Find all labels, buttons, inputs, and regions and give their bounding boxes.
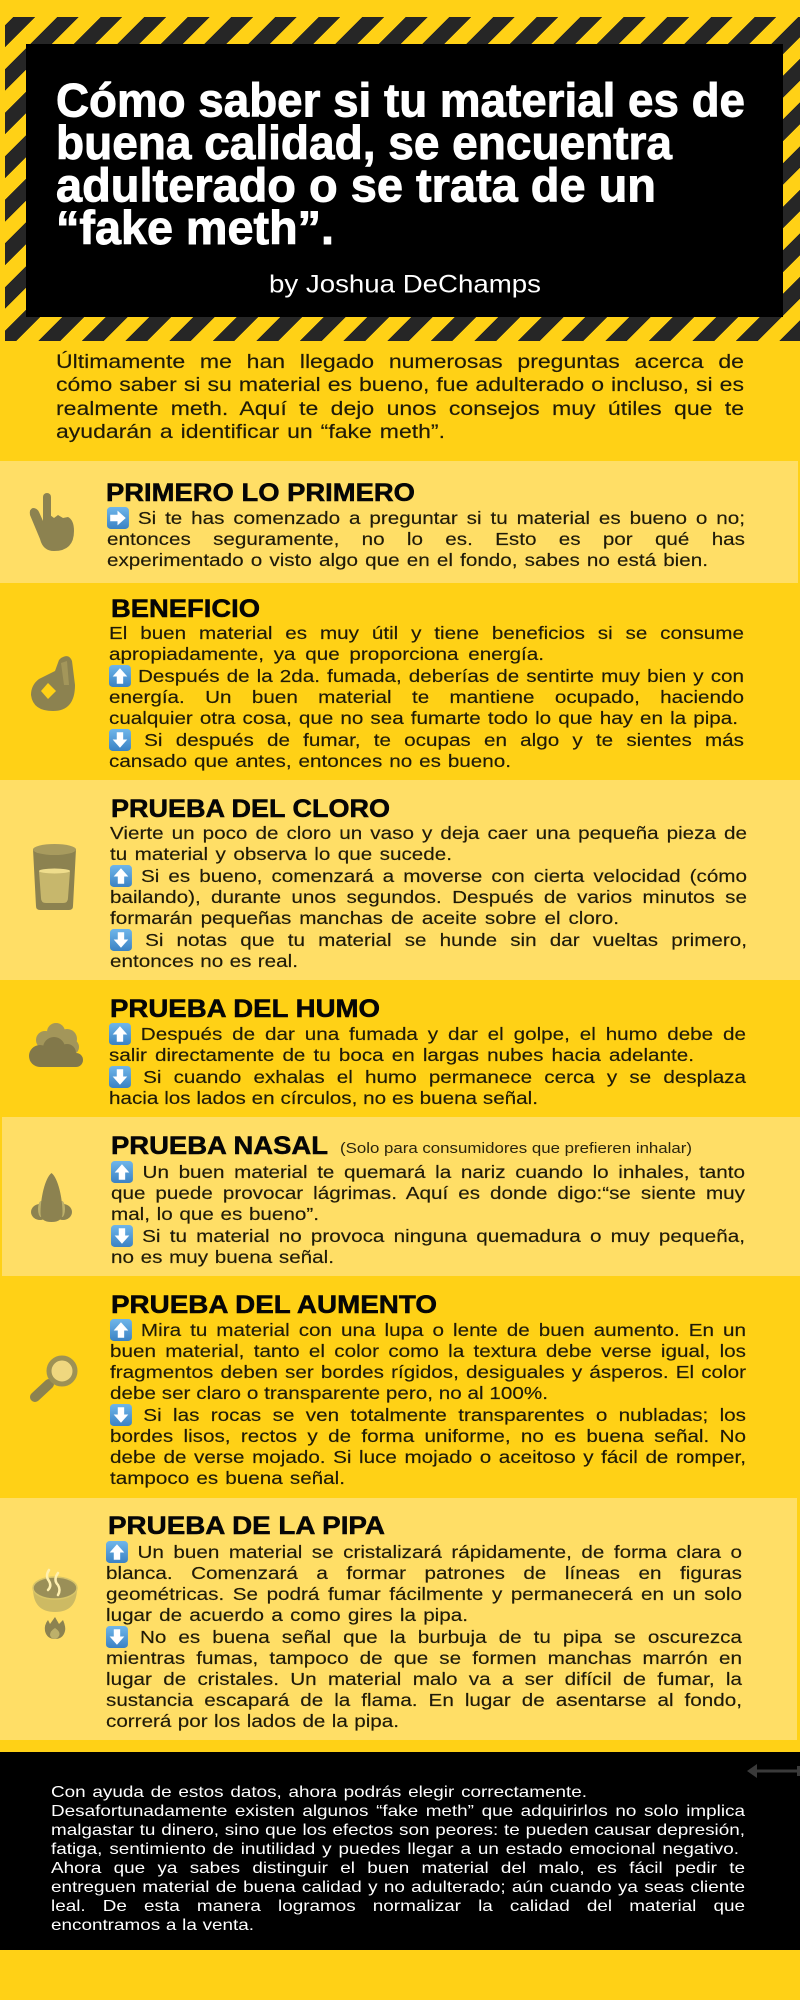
icon: smoke cloud (29, 1023, 83, 1067)
body text: debe ser claro o transparente pero, no al 100%. (110, 1383, 548, 1403)
closing text: fatiga, sentimiento de inutilidad y puedes llegar a un estado emocional negativo. (51, 1841, 739, 1858)
heading: PRUEBA NASAL (111, 1132, 328, 1160)
body text (110, 1319, 746, 1488)
body text: Si las rocas se ven totalmente transparentes o nubladas; los (143, 1405, 746, 1425)
icon: pipe bowl and flame (32, 1568, 78, 1639)
title: buena calidad, se encuentra (56, 116, 673, 169)
closing text: entreguen material de buena calidad y no adulterado; aún cuando ya seas cliente (51, 1879, 745, 1896)
body text: bailando), durante unos segundos. Después de varios minutos se (110, 887, 747, 907)
body text: lugar de cristales. Un material malo va a ser difícil de fumar, la (106, 1669, 742, 1689)
intro text: Últimamente me han llegado numerosas preguntas acerca de (56, 351, 744, 373)
body text: blanca. Comenzará a formar patrones de líneas en figuras (106, 1563, 742, 1583)
body text: correrá por los lados de la pipa. (106, 1711, 399, 1731)
body text: lugar de acuerdo a como gires la pipa. (106, 1605, 468, 1625)
icon: glass (33, 844, 76, 910)
body text: debe de verse mojado. Si luce mojado o aceitoso y fácil de romper, (110, 1447, 746, 1467)
title: “fake meth”. (56, 201, 334, 254)
closing text: Ahora que ya sabes distinguir el buen material del malo, es fácil pedir te (51, 1860, 745, 1877)
body text (106, 1541, 742, 1731)
closing text: Desafortunadamente existen algunos “fake meth” que adquirirlos no solo implica (51, 1803, 745, 1820)
note: (Solo para consumidores que prefieren inhalar) (340, 1141, 692, 1157)
body text: Si cuando exhalas el humo permanece cerca y se desplaza (143, 1067, 746, 1087)
body text: sustancia escapará de la flama. En lugar de asentarse al fondo, (106, 1690, 742, 1710)
closing text: leal. De esta manera logramos normalizar la calidad del material que (51, 1898, 745, 1915)
body text: Un buen material te quemará la nariz cuando lo inhales, tanto (143, 1162, 745, 1182)
title panel (26, 44, 783, 317)
body text: mal, lo que es bueno”. (111, 1204, 319, 1224)
closing text: Con ayuda de estos datos, ahora podrás elegir correctamente. (51, 1784, 587, 1801)
title: Cómo saber si tu material es de (56, 74, 745, 127)
body text: No es buena señal que la burbuja de tu pipa se oscurezca (140, 1627, 742, 1647)
closing text: encontramos a la venta. (51, 1917, 254, 1934)
heading: PRUEBA DEL CLORO (111, 794, 390, 822)
heading: PRIMERO LO PRIMERO (106, 479, 415, 507)
heading: PRUEBA DE LA PIPA (108, 1512, 385, 1540)
panel: beneficio (31, 594, 744, 771)
body text: apropiadamente, ya que proporciona energía. (109, 644, 544, 664)
panel: primero lo primero (0, 461, 798, 583)
body text: Si te has comenzado a preguntar si tu material es bueno o no; (138, 508, 745, 528)
panel: prueba de la pipa (0, 1498, 797, 1740)
title: adulterado o se trata de un (56, 159, 656, 212)
body text: mientras fumas, tampoco de que se formen manchas marrón en (106, 1648, 742, 1668)
body text: Vierte un poco de cloro un vaso y deja caer una pequeña pieza de (110, 823, 747, 843)
body text: El buen material es muy útil y tiene beneficios si se consume (109, 623, 744, 643)
panel: prueba del aumento (30, 1290, 746, 1488)
icon: magnifier (30, 1356, 78, 1402)
icon: ok hand (31, 656, 75, 711)
body text: salir directamente de tu boca en largas nubes hacia adelante. (109, 1045, 694, 1065)
body text: Después de la 2da. fumada, deberías de sentirte muy bien y con (138, 666, 744, 686)
body text: que puede provocar lágrimas. Aquí es donde digo:“se siente muy (111, 1183, 745, 1203)
body text: bordes lisos, rectos y de forma uniforme, no es buena señal. No (110, 1426, 746, 1446)
body text: Si es bueno, comenzará a moverse con cierta velocidad (cómo (141, 866, 747, 886)
body text: energía. Un buen material te mantiene ocupado, haciendo (109, 687, 744, 707)
body text: geométricas. Se podrá fumar fácilmente y permanecerá en un solo (106, 1584, 742, 1604)
body text (110, 1161, 745, 1267)
body text: Si después de fumar, te ocupas en algo y te sientes más (144, 730, 744, 750)
body text (108, 623, 744, 771)
panel: prueba del humo (29, 994, 746, 1108)
panel: prueba nasal (2, 1117, 800, 1276)
body text (110, 823, 747, 971)
body text: tampoco es buena señal. (110, 1468, 345, 1488)
intro text (56, 350, 744, 443)
byline: by Joshua DeChamps (269, 271, 541, 299)
body text: tu material y observa lo que sucede. (110, 844, 452, 864)
body text: fragmentos deben ser bordes rígidos, desiguales y ásperos. El color (110, 1362, 746, 1382)
icon: pointing hand (30, 493, 74, 551)
body text: Si notas que tu material se hunde sin dar vueltas primero, (145, 930, 747, 950)
body text: Si tu material no provoca ninguna quemadura o muy pequeña, (142, 1226, 745, 1246)
body text: Después de dar una fumada y dar el golpe, el humo debe de (141, 1024, 746, 1044)
title (56, 74, 745, 254)
intro text: ayudarán a identificar un “fake meth”. (56, 421, 445, 443)
body text: Un buen material se cristalizará rápidamente, de forma clara o (137, 1542, 742, 1562)
body text: buen material, tanto el color como la textura debe verse igual, los (110, 1341, 746, 1361)
arrow (747, 1764, 800, 1778)
heading: PRUEBA DEL AUMENTO (111, 1290, 437, 1318)
body text: entonces no es real. (110, 951, 298, 971)
icon: nose (31, 1173, 72, 1222)
intro text: realmente meth. Aquí te dejo unos consejos muy útiles que te (56, 398, 744, 420)
body text: Mira tu material con una lupa o lente de buen aumento. En un (141, 1320, 746, 1340)
heading: BENEFICIO (111, 594, 260, 622)
body text: entonces seguramente, no lo es. Esto es por qué has (107, 529, 745, 549)
panel: closing black (0, 1752, 800, 1950)
hazard stripe frame (5, 17, 800, 341)
body text: hacia los lados en círculos, no es buena señal. (109, 1088, 538, 1108)
body text (108, 1023, 746, 1108)
body text: no es muy buena señal. (111, 1247, 334, 1267)
body text: cansado que antes, entonces no es bueno. (109, 751, 511, 771)
body text (106, 507, 745, 570)
intro text: cómo saber si su material es bueno, fue adulterado o incluso, si es (56, 374, 744, 396)
body text: cualquier otra cosa, que no sea fumarte todo lo que hay en la pipa. (109, 708, 738, 728)
body text: experimentado o visto algo que en el fondo, sabes no está bien. (107, 550, 708, 570)
heading: PRUEBA DEL HUMO (110, 994, 380, 1022)
closing text: malgastar tu dinero, sino que los efectos son peores: te pueden causar depresión, (51, 1822, 745, 1839)
panel: prueba del cloro (0, 780, 800, 980)
closing text (51, 1784, 745, 1934)
body text: formarán pequeñas manchas de aceite sobre el cloro. (110, 908, 619, 928)
